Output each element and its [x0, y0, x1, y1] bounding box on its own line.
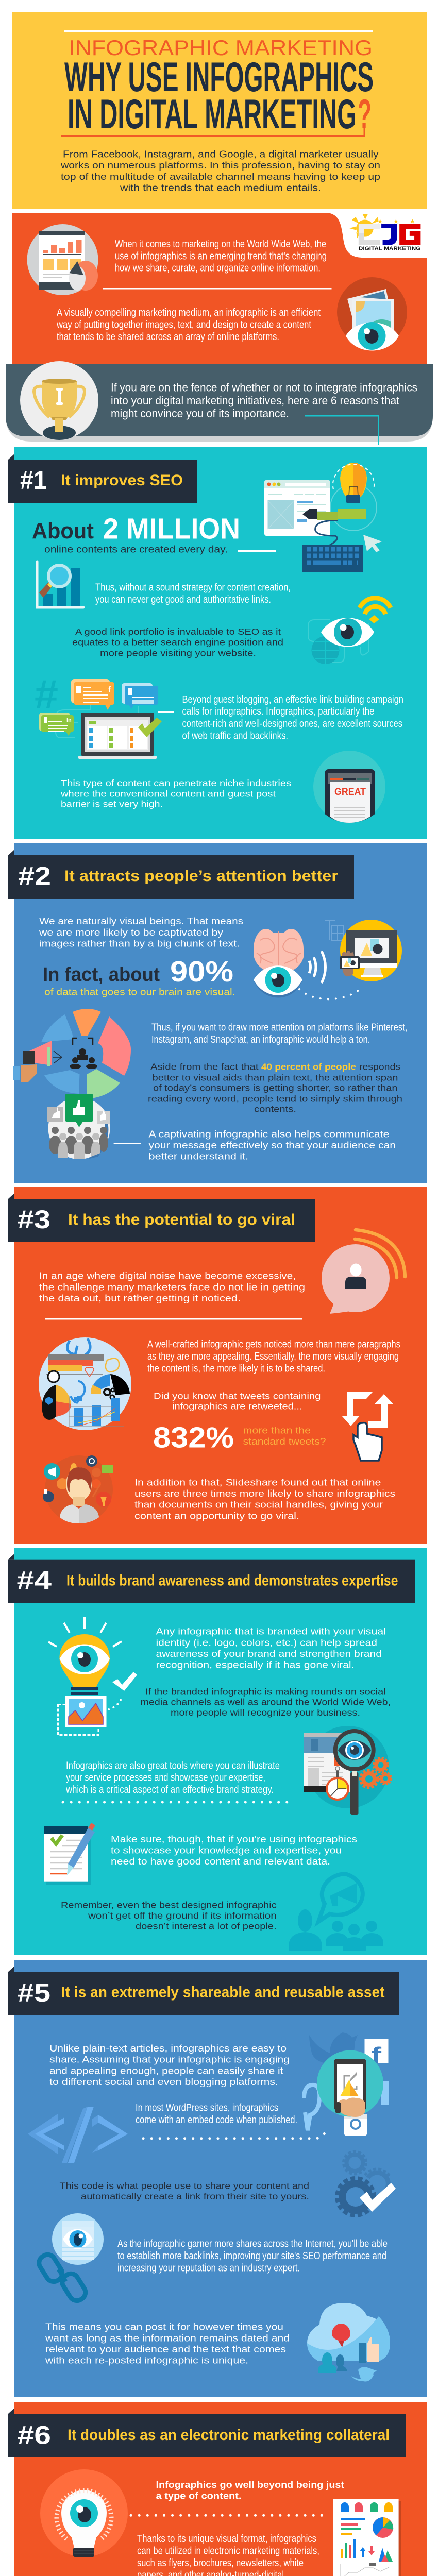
text: marketing on the web: When it comes to marketing on the World Wide Web, the — [115, 239, 326, 250]
text: share your content: automatically create a link from their site to yours. — [81, 2191, 309, 2201]
statistic: 2 million — [32, 512, 240, 555]
icon: charts sheet with thumb — [333, 2499, 401, 2576]
text: good content: need to have good content and relevant data. — [111, 1856, 330, 1867]
text: marketing on the web — [115, 239, 327, 274]
text: embed code: come with an embed code when published. — [136, 2114, 297, 2126]
text: post however times: This means you can post it for however times you — [45, 2322, 283, 2332]
text: slideshare — [134, 1477, 395, 1521]
icon: social bubbles and laptop: # — [35, 671, 58, 717]
text: easy to share: to different social and even blogging platforms. — [49, 2077, 278, 2087]
text: making rounds — [141, 1686, 391, 1718]
text: electronic marketing: Thanks to its unique visual format, infographics — [137, 2533, 316, 2545]
text: visual identity — [156, 1626, 386, 1670]
text: sound strategy: you can never get good and authoritative links. — [95, 594, 271, 605]
panel: reason 6 — [8, 2402, 427, 2576]
text: niche industries: where the conventional content and guest post — [60, 789, 276, 799]
heading: #2 — [8, 850, 354, 899]
icon: phone and social networks — [304, 2032, 389, 2136]
text: captivating infographic: your message effectively so that your audience can — [148, 1140, 396, 1150]
text: post however times: relevant to your audience and the text that comes — [45, 2344, 286, 2354]
heading: #2: #2 — [18, 862, 51, 891]
text: backlinks: to establish more backlinks, improving your site's SEO performance and — [117, 2250, 386, 2262]
text: making rounds: If the branded infographic is making rounds on social — [145, 1686, 386, 1697]
panel: reason 1 — [8, 447, 427, 839]
text: captivating infographic: better understand it. — [148, 1151, 248, 1162]
text: attention span — [148, 1062, 402, 1114]
heading: main title — [64, 54, 374, 138]
heading: #6: It doubles as an electronic marketing collateral — [68, 2427, 390, 2444]
icon: speaking person — [322, 1230, 405, 1314]
icon: crowd and likes — [47, 1094, 110, 1159]
text: service processes: which is a critical aspect of an effective brand strategy. — [65, 1784, 274, 1795]
logo: CJG small: DIGITAL MARKETING — [359, 246, 420, 251]
heading: #5 — [8, 1966, 399, 2015]
statistic: 832 percent: infographics are retweeted... — [172, 1401, 302, 1412]
text: on the fence — [111, 381, 417, 420]
text: service processes: Infographics are also great tools where you can illustrate — [66, 1760, 280, 1771]
text: well-crafted infographic: the content is, the more likely it is to be shared. — [147, 1363, 325, 1374]
text: on the fence: might convince you of its importance. — [111, 407, 289, 420]
heading: #4: #4 — [16, 1566, 52, 1595]
icon: magnifier with gears — [304, 1726, 392, 1815]
text: compelling medium: way of putting together images, text, and design to create a content — [56, 319, 311, 331]
text: visual beings: We are naturally visual beings. That means — [39, 916, 243, 926]
text: intro paragraph — [60, 149, 380, 193]
panel: title header — [12, 12, 427, 209]
text: service processes — [65, 1760, 280, 1795]
statistic: 90 percent: of data that goes to our brain are visual. — [44, 987, 235, 997]
text: digital noise — [39, 1271, 305, 1303]
panel: orange introduction — [12, 213, 427, 364]
text: electronic marketing: such as flyers, brochures, newsletters, white — [137, 2557, 304, 2569]
icon: trophy — [20, 361, 98, 440]
icon: gears and check — [337, 2151, 396, 2215]
icon: checklist and pencil — [44, 1823, 95, 1885]
text: digital noise: the data out, but rather getting it noticed. — [39, 1293, 241, 1303]
text: remember: doesn’t interest a lot of people. — [136, 1921, 277, 1931]
text: compelling medium: A visually compelling marketing medium, an infographic is an efficient — [57, 307, 321, 318]
statistic: 832 percent — [153, 1391, 326, 1454]
heading: kicker: INFOGRAPHIC MARKETING — [69, 36, 373, 60]
statistic: 2 million: online contents are created every day. — [44, 545, 228, 555]
text: slideshare: users are three times more likely to share infographics — [134, 1488, 395, 1499]
text: captivating infographic: A captivating infographic also helps communicate — [148, 1129, 390, 1139]
text: easy to share: share. Assuming that your infographic is engaging — [49, 2055, 290, 2065]
text: electronic marketing: can be utilized in electronic marketing materials, — [137, 2546, 319, 2557]
text: intro paragraph: From Facebook, Instagram, and Google, a digital marketer usually — [63, 149, 378, 160]
text: link building campaign — [182, 694, 403, 741]
icon: social bubbles and laptop: in — [66, 718, 72, 724]
text: embed code: In most WordPress sites, infographics — [136, 2102, 278, 2113]
text: link portfolio — [72, 626, 283, 658]
text: visual beings — [39, 916, 243, 949]
text: captivating infographic — [148, 1129, 396, 1162]
statistic: 832 percent: 832% — [153, 1421, 234, 1454]
panel: six reasons bar — [6, 361, 433, 445]
icon: page eye and chain — [36, 2213, 104, 2303]
text: on the fence: If you are on the fence of whether or not to integrate infographics — [111, 381, 417, 394]
text: post however times — [45, 2322, 290, 2365]
text: compelling medium — [56, 307, 321, 343]
text: attention span: responds — [359, 1062, 400, 1072]
icon: eye with wifi — [308, 598, 391, 664]
icon: content creation desk — [264, 463, 382, 572]
statistic: 832 percent: Did you know that tweets containing — [154, 1391, 321, 1401]
text: electronic marketing — [137, 2533, 319, 2576]
text: easy to share: Unlike plain-text articles, infographics are easy to — [49, 2043, 287, 2054]
text: backlinks — [117, 2239, 388, 2274]
text: visual identity: recognition, especially if it has gone viral. — [156, 1660, 355, 1670]
heading: #3: It has the potential to go viral — [68, 1211, 295, 1228]
text: visual identity: awareness of your brand and strengthen brand — [156, 1649, 382, 1659]
text: digital noise: the challenge many marketers face do not lie in getting — [39, 1282, 305, 1292]
text: remember — [61, 1900, 277, 1931]
heading: #1 — [8, 454, 197, 503]
text: intro paragraph: works on numerous platforms. In this profession, having to stay on — [60, 160, 380, 171]
icon: cloud with likes — [307, 2303, 390, 2381]
text: platforms — [151, 1022, 407, 1045]
icon: eye bulb — [40, 2469, 128, 2557]
text: easy to share: and appealing enough, people can easily share it — [49, 2065, 283, 2076]
icon: code brackets — [28, 2107, 128, 2163]
text: visual identity: Any infographic that is branded with your visual — [156, 1626, 386, 1637]
icon: retweet with cursor — [342, 1392, 393, 1461]
text: intro paragraph: top of the multitude of available channel means having to keep up — [61, 172, 380, 182]
text: well-crafted infographic — [147, 1338, 400, 1374]
text: beyond content: a type of content. — [156, 2491, 241, 2501]
text: link portfolio: equates to a better search engine position and — [72, 637, 283, 648]
text: on the fence: into your digital marketing initiatives, here are 6 reasons that — [111, 394, 400, 407]
statistic: 832 percent: more than the — [243, 1425, 311, 1435]
text: visual identity: identity (i.e. logo, colors, etc.) can help spread — [156, 1637, 377, 1648]
heading: #3: #3 — [18, 1205, 50, 1234]
statistic: 90 percent — [43, 955, 235, 997]
icon: person with social icons — [43, 1455, 113, 1523]
heading: #1: #1 — [20, 466, 47, 495]
text: sound strategy: Thus, without a sound strategy for content creation, — [95, 582, 291, 594]
icon: tablet with great — [313, 751, 385, 823]
text: marketing on the web: use of infographics is an emerging trend that's changing — [115, 250, 327, 262]
panel: reason 4 — [8, 1548, 427, 1955]
statistic: 90 percent: In fact, about — [43, 964, 160, 986]
text: post however times: with each re-posted infographic is unique. — [45, 2355, 248, 2365]
text: attention span: 40 percent of people — [261, 1062, 356, 1072]
text: digital noise: In an age where digital noise have become excessive, — [39, 1271, 296, 1281]
text: compelling medium: that tends to be shared across an array of online platforms. — [57, 331, 279, 343]
text: attention span: reading every word, people tend to simply skim through — [148, 1093, 402, 1104]
text: share your content: This code is what people use to share your content and — [60, 2181, 309, 2191]
icon: tablet with great: GREAT — [334, 787, 366, 798]
text: share your content — [60, 2181, 309, 2201]
heading: #5: It is an extremely shareable and reusable asset — [61, 1984, 385, 2001]
text: beyond content — [156, 2480, 344, 2501]
icon: eye bulb and picture — [48, 1617, 137, 1735]
panel: reason 3 — [8, 1187, 427, 1544]
text: beyond content: Infographics go well beyond being just — [156, 2480, 344, 2490]
text: link portfolio: more people visiting your website. — [100, 648, 256, 658]
text: attention span: of today’s consumers is getting shorter, so rather than — [153, 1083, 398, 1093]
text: good content — [111, 1834, 357, 1867]
text: attention span: better to visual aids than plain text, the attention span — [153, 1072, 398, 1082]
statistic: 832 percent: standard tweets? — [243, 1436, 326, 1447]
panel: reason 5 — [8, 1960, 427, 2397]
statistic: 2 million: 2 MILLION — [103, 512, 240, 545]
text: intro paragraph: with the trends that each medium entails. — [120, 183, 321, 193]
heading: #3 — [8, 1193, 315, 1242]
statistic: 90 percent: 90% — [170, 955, 233, 988]
text: attention span: contents. — [254, 1104, 296, 1114]
icon: chart collage circle — [39, 1337, 131, 1430]
text: niche industries: barrier is set very high. — [61, 799, 163, 809]
text: good content: to showcase your knowledge and expertise, you — [111, 1845, 342, 1855]
text: platforms: Instagram, and Snapchat, an infographic would help a ton. — [151, 1034, 370, 1045]
text: good content: Make sure, though, that if you’re using infographics — [111, 1834, 357, 1844]
text: making rounds: more people will recognize your business. — [171, 1707, 360, 1718]
heading: #6 — [8, 2408, 406, 2457]
text: slideshare: In addition to that, Slideshare found out that online — [134, 1477, 381, 1487]
panel: reason 2 — [8, 843, 427, 1183]
text: remember: Remember, even the best designed infographic — [61, 1900, 277, 1910]
text: visual beings: we are more likely to be captivated by — [39, 927, 223, 938]
text: marketing on the web: how we share, curate, and organize online information. — [115, 263, 321, 274]
icon: brain and eye — [254, 929, 326, 997]
text: service processes: your service processes and showcase your expertise, — [66, 1772, 265, 1784]
text: backlinks: increasing your reputation as an industry expert. — [117, 2262, 300, 2274]
text: embed code — [136, 2102, 297, 2126]
statistic: 2 million: About — [32, 518, 94, 544]
text: niche industries — [60, 778, 291, 809]
heading: #5: #5 — [18, 1978, 50, 2007]
icon: audience watermark — [289, 1874, 383, 1951]
heading: #1: It improves SEO — [61, 472, 183, 489]
icon: chart and magnifier — [37, 562, 83, 607]
icon: wheel with megaphone — [13, 1009, 131, 1099]
text: backlinks: As the infographic garner more shares across the Internet, you'll be able — [117, 2239, 388, 2250]
text: link building campaign: calls for infographics. Infographics, particularly the — [182, 706, 374, 717]
heading: main title: ? — [358, 91, 372, 138]
text: niche industries: This type of content can penetrate niche industries — [61, 778, 291, 788]
icon: monitor and tablet — [325, 920, 402, 981]
text: attention span: Aside from the fact that — [150, 1062, 259, 1072]
icon: document with bar chart — [27, 224, 98, 295]
text: link building campaign: of web traffic and backlinks. — [182, 730, 288, 741]
text: post however times: want as long as the information remains dated and — [45, 2333, 290, 2343]
icon: social bubbles and laptop: f — [108, 685, 111, 694]
text: easy to share — [49, 2043, 290, 2087]
text: sound strategy — [95, 582, 291, 605]
text: slideshare: than documents on their social handles, giving your — [134, 1500, 383, 1510]
text: making rounds: media channels as well as around the World Wide Web, — [141, 1697, 391, 1707]
text: visual beings: images rather than by a big chunk of text. — [39, 939, 240, 949]
text: remember: won’t get off the ground if its information — [88, 1910, 277, 1921]
heading: #4 — [8, 1554, 415, 1603]
heading: #2: It attracts people’s attention better — [64, 868, 338, 885]
text: link portfolio: A good link portfolio is invaluable to SEO as it — [75, 626, 281, 637]
logo: CJG small — [349, 214, 420, 251]
text: slideshare: content an opportunity to go viral. — [134, 1511, 299, 1521]
icon: phone and social networks: f — [371, 2043, 381, 2068]
icon: photos and eye — [337, 277, 407, 350]
icon: social bubbles and laptop — [35, 671, 162, 759]
heading: #6: #6 — [18, 2420, 51, 2449]
